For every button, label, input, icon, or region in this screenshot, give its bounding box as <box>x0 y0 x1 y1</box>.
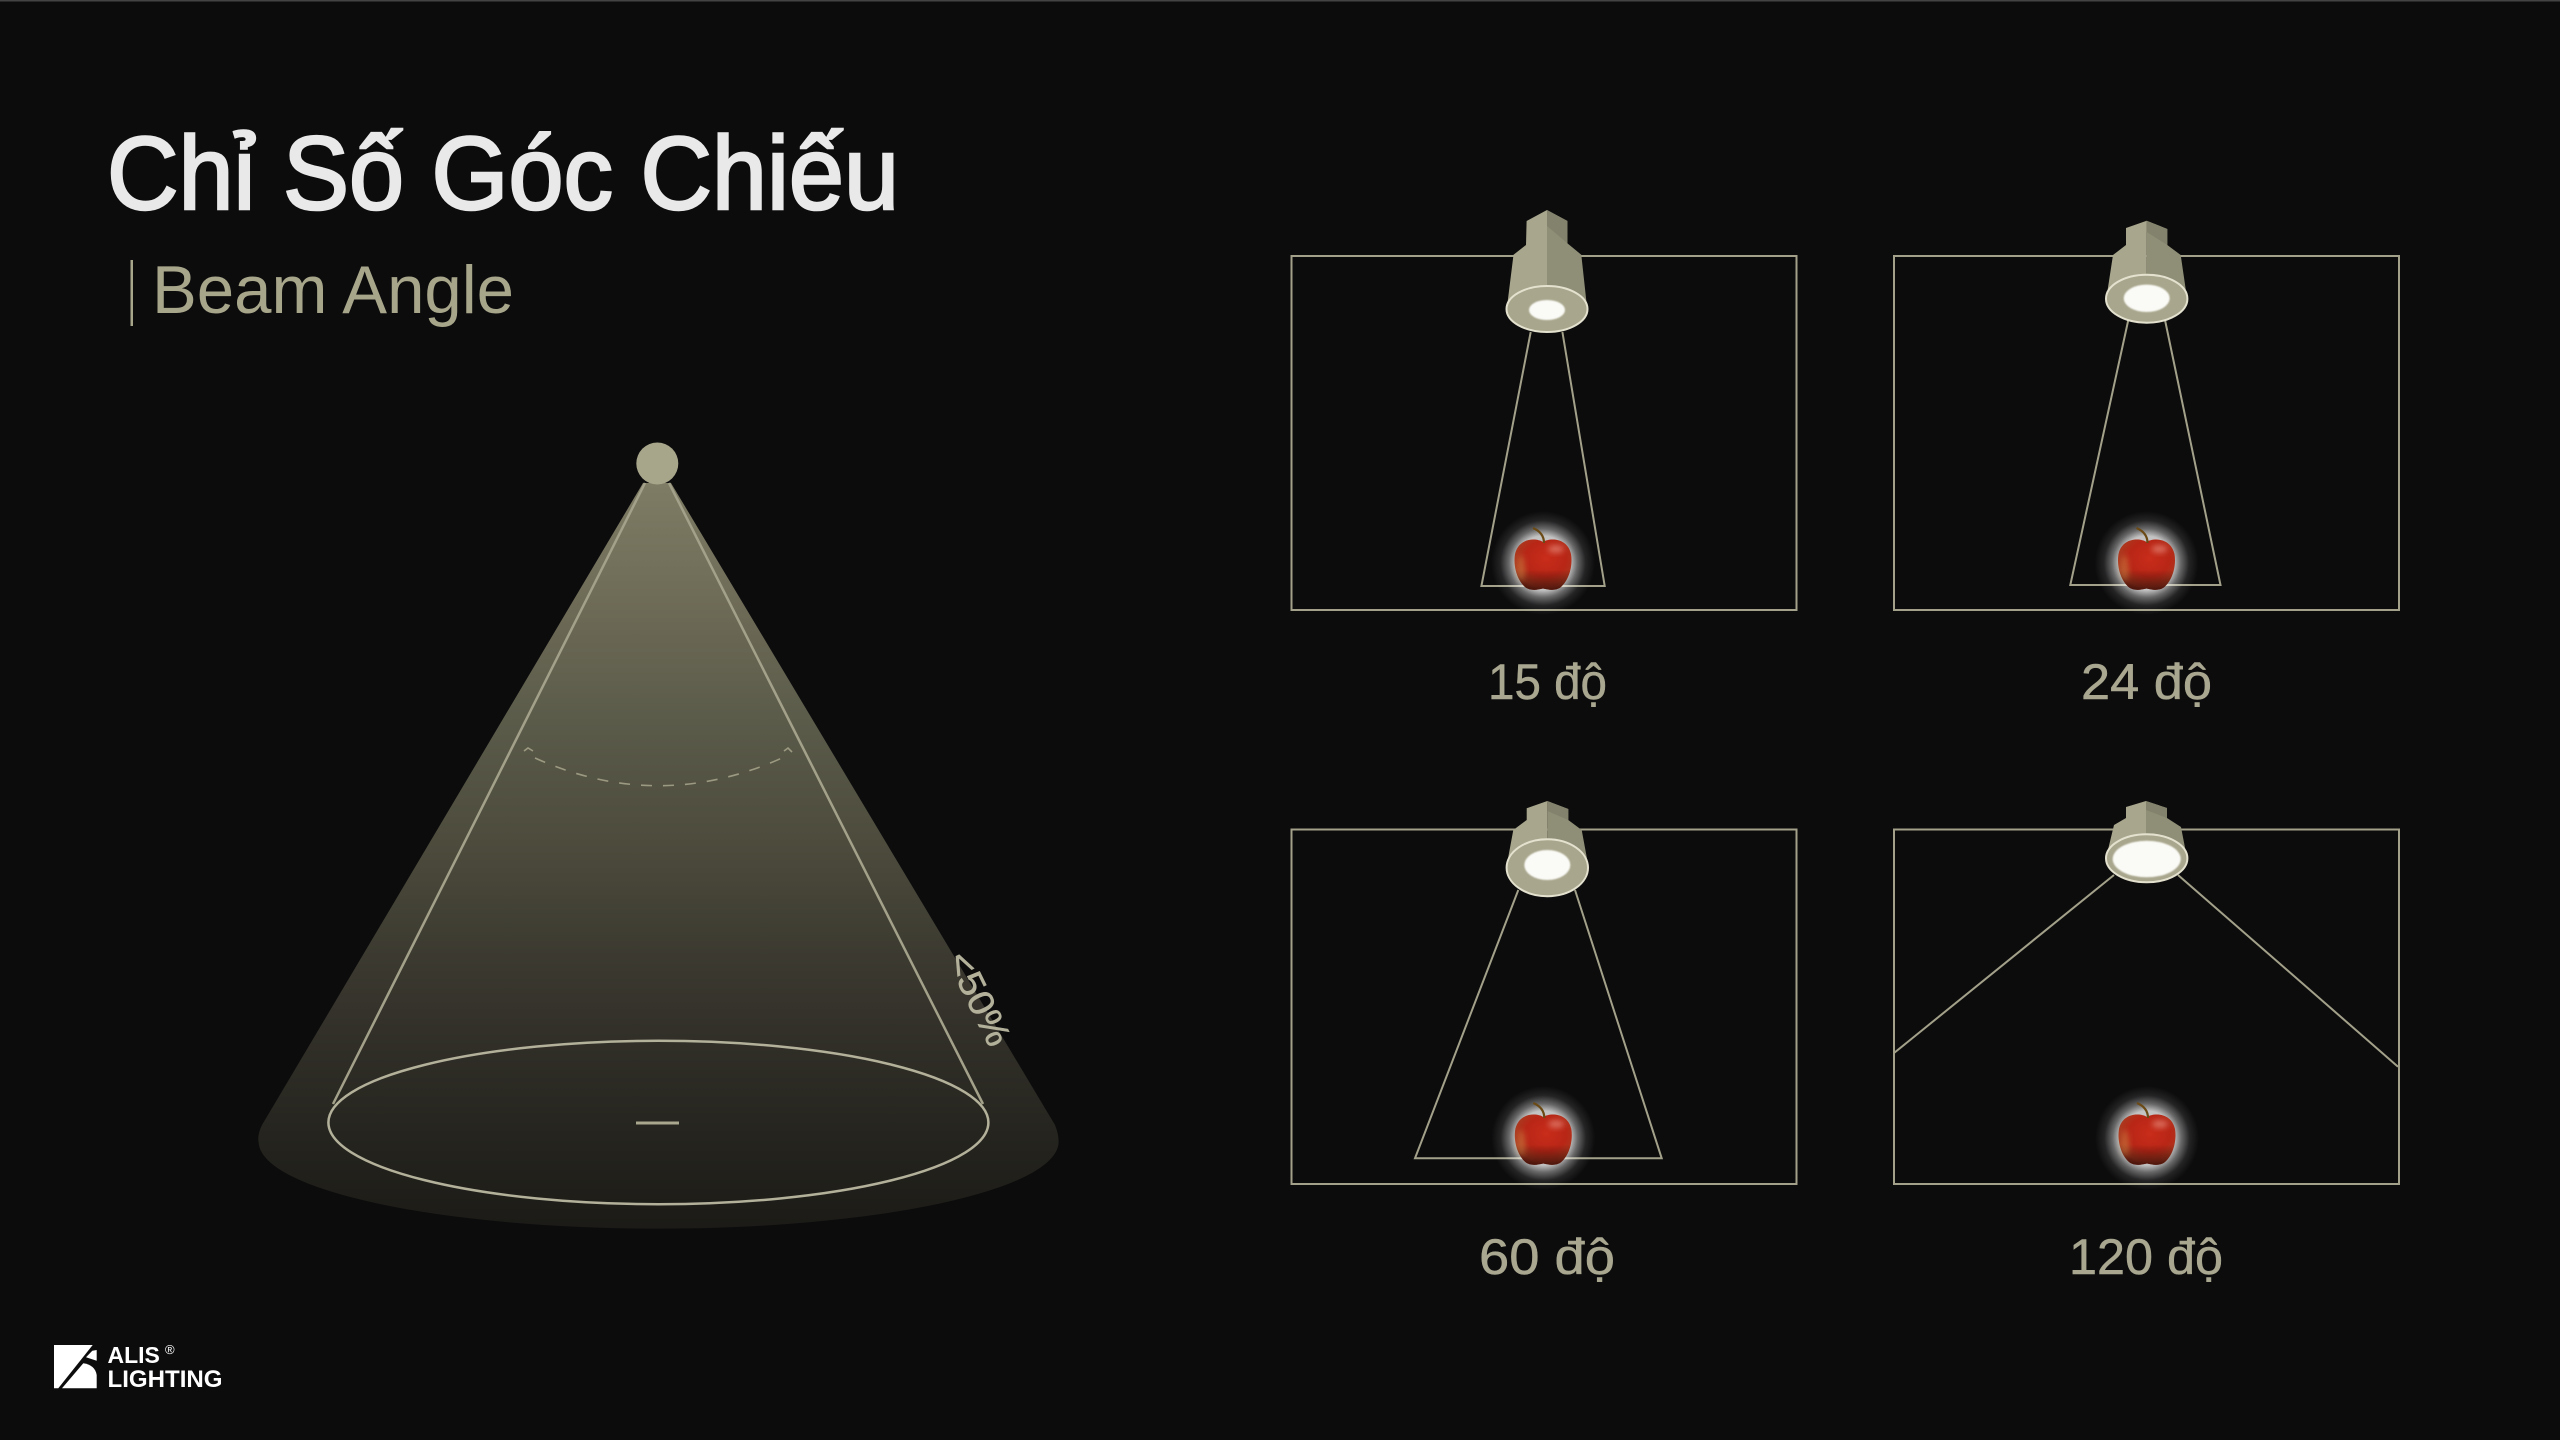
dashed angle arc <box>524 748 792 786</box>
apple with glow <box>1491 511 1595 615</box>
label: 120 độ <box>2069 1229 2223 1285</box>
label: 15 độ <box>1488 654 1607 710</box>
logo: Alis Lighting: ® <box>165 1342 175 1357</box>
label: 24 độ <box>2081 654 2212 710</box>
panel: 15 degree <box>1292 210 1796 710</box>
outer cone of light <box>258 483 1059 1229</box>
logo wordmark: ALIS <box>108 1342 160 1368</box>
lamp <box>1507 801 1588 896</box>
title: Chỉ Số Góc Chiếu <box>107 116 899 232</box>
apple with glow <box>1491 1086 1595 1190</box>
logo: Alis Lighting: LIGHTING <box>108 1366 222 1393</box>
subtitle: Beam Angle: Beam Angle <box>152 252 514 328</box>
frame <box>1894 256 2399 610</box>
lamp <box>1506 210 1588 332</box>
beam outline <box>1894 875 2398 1067</box>
diagram: light cone <box>258 442 1059 1229</box>
panel: 24 degree <box>1894 221 2399 710</box>
beam outline <box>2070 320 2220 585</box>
frame <box>1894 830 2399 1184</box>
lamp <box>2106 801 2187 882</box>
apple with glow <box>2094 511 2198 615</box>
light source dot <box>636 442 678 484</box>
rotated label: less than 50 percent: <50% <box>939 945 1020 1052</box>
logo mark <box>54 1345 97 1388</box>
panel: 120 degree <box>1894 801 2399 1285</box>
beam outline <box>1481 332 1605 586</box>
label: 60 độ <box>1479 1229 1615 1285</box>
logo: Alis Lighting <box>54 1342 222 1393</box>
frame <box>1292 256 1796 610</box>
centre dash mark <box>636 1122 679 1124</box>
beam outline <box>1415 890 1662 1158</box>
apple with glow <box>2095 1086 2199 1190</box>
inner beam outline <box>333 483 983 1104</box>
panel: 60 degree <box>1292 801 1796 1285</box>
lamp <box>2106 221 2187 323</box>
frame <box>1292 830 1796 1184</box>
beam base ellipse <box>328 1041 988 1204</box>
